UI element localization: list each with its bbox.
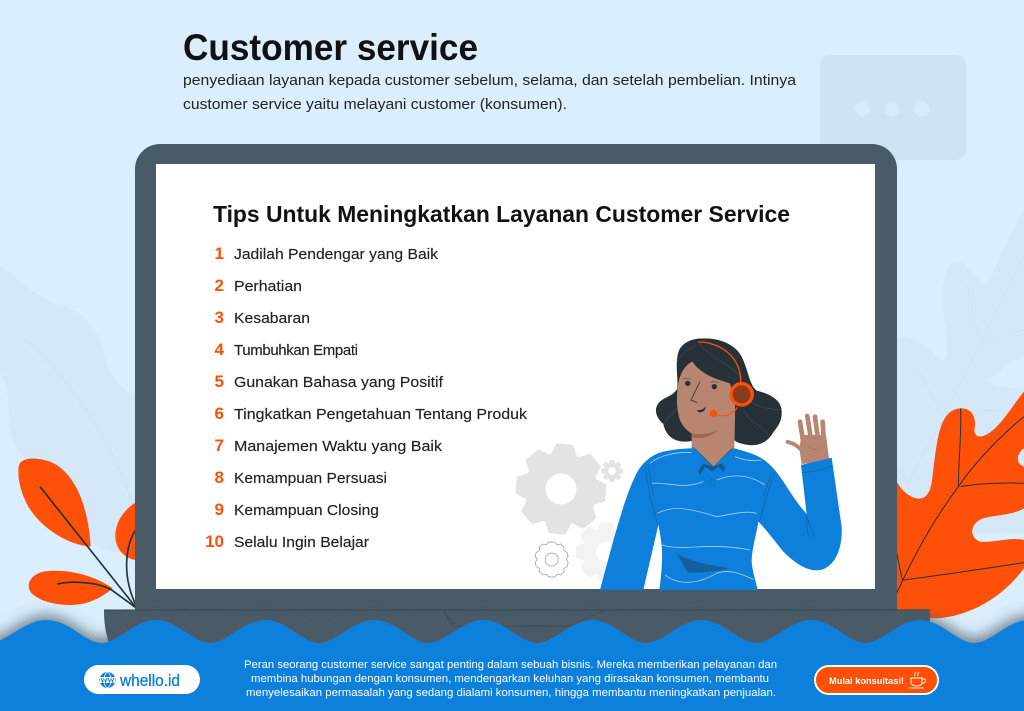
leaf bottom	[29, 571, 113, 605]
icon: globe	[100, 672, 115, 688]
tips list: Selalu Ingin Belajar	[234, 534, 369, 551]
illustration: customer service agent	[600, 338, 842, 590]
orange leaf right	[897, 392, 1024, 618]
faded gear	[576, 522, 634, 582]
tips list: Jadilah Pendengar yang Baik	[234, 246, 439, 263]
tips list: 9	[215, 500, 224, 519]
laptop frame	[135, 144, 897, 612]
button	[815, 666, 938, 694]
tips list: 3	[215, 308, 224, 327]
title: Customer service	[183, 27, 478, 68]
eyes and nose	[683, 378, 719, 412]
tips list: Perhatian	[234, 278, 302, 295]
chin shadow	[692, 430, 717, 438]
leaf top	[18, 459, 91, 547]
tips list: 2	[215, 276, 224, 295]
icon: chat bubble	[820, 55, 966, 160]
heading: Tips Untuk Meningkatkan Layanan Customer Service	[213, 201, 790, 227]
small gear	[601, 460, 623, 482]
tips list: 7	[215, 436, 224, 455]
hair strands	[663, 343, 778, 435]
tips list: Gunakan Bahasa yang Positif	[234, 374, 444, 391]
laptop screen	[156, 164, 875, 589]
logo pill: whello.id	[119, 671, 180, 690]
tips list: Tumbuhkan Empati	[234, 342, 358, 359]
headset	[698, 342, 754, 417]
tips list: 1	[215, 244, 224, 263]
orange plant left	[18, 459, 140, 608]
large gear	[515, 443, 607, 535]
intro text	[183, 72, 797, 113]
hair	[656, 338, 782, 445]
background leaf right	[897, 210, 1024, 533]
button: Mulai konsultasi!	[829, 676, 904, 687]
intro text: customer service yaitu melayani customer (konsumen).	[183, 96, 567, 113]
tips list: Manajemen Waktu yang Baik	[234, 438, 443, 455]
tips list: 4	[215, 340, 225, 359]
footer text: membina hubungan dengan konsumen, mendengarkan keluhan yang dirasakan konsumen, membantu	[251, 673, 769, 685]
tips list: Kemampuan Closing	[234, 502, 379, 519]
sweater	[600, 448, 842, 590]
leaf behind laptop	[115, 500, 140, 561]
icon: gears	[515, 443, 634, 582]
background leaf left	[0, 267, 140, 553]
tips list: 5	[215, 372, 224, 391]
stems	[40, 487, 137, 608]
tips list: 8	[215, 468, 224, 487]
icon: cup	[909, 672, 926, 688]
footer text: menyelesaikan permasalah yang sedang dialami konsumen, hingga membantu meningkatkan penjualan.	[246, 687, 776, 699]
neck	[692, 417, 735, 468]
outline gear	[535, 542, 568, 577]
tips list: Tingkatkan Pengetahuan Tentang Produk	[234, 406, 528, 423]
logo pill	[84, 665, 200, 694]
tips list: Kesabaran	[234, 310, 310, 327]
tips list: 6	[215, 404, 224, 423]
tips list: Kemampuan Persuasi	[234, 470, 387, 487]
collar	[692, 446, 734, 487]
sweater lines	[650, 452, 765, 582]
tips list: 10	[205, 532, 224, 551]
wave footer	[0, 620, 1024, 711]
laptop base	[104, 610, 930, 660]
footer text	[244, 659, 777, 699]
hand	[788, 416, 829, 464]
sweater shading	[676, 553, 729, 573]
laptop	[104, 144, 930, 660]
intro text: penyediaan layanan kepada customer sebelum, selama, dan setelah pembelian. Intinya	[183, 72, 797, 89]
tips list	[205, 244, 528, 551]
footer text: Peran seorang customer service sangat penting dalam sebuah bisnis. Mereka memberikan pelayanan dan	[244, 659, 777, 671]
face	[677, 362, 735, 437]
